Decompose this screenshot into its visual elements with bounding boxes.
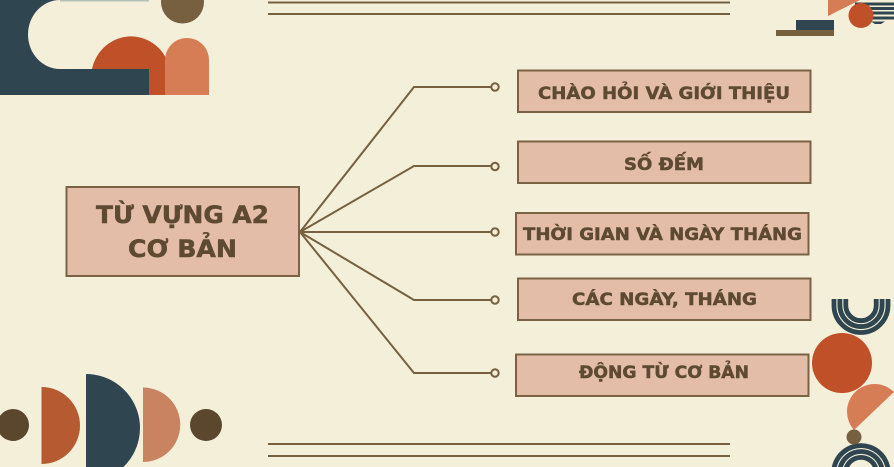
topic box: numbers: SỐ ĐẾM: [624, 151, 704, 175]
connector end markers: [491, 83, 499, 377]
topic box: days and months: CÁC NGÀY, THÁNG: [572, 288, 757, 310]
topic box: basic verbs: ĐỘNG TỪ CƠ BẢN: [579, 360, 749, 383]
topic box: basic verbs: [516, 354, 808, 396]
decoration: top left shapes: [0, 0, 209, 95]
central topic box: TỪ VỰNG A2: [96, 199, 269, 229]
topic box: time and dates: THỜI GIAN VÀ NGÀY THÁNG: [523, 223, 802, 245]
decoration: right side shapes: [812, 299, 894, 467]
decoration: top right shapes: [776, 0, 894, 36]
decoration: bottom left half circles: [0, 374, 222, 467]
central topic box: [66, 187, 299, 276]
topic box: numbers: [518, 142, 810, 183]
central topic box: CƠ BẢN: [128, 230, 237, 263]
connector lines from the central topic: [300, 87, 491, 373]
topic box: greetings: CHÀO HỎI VÀ GIỚI THIỆU: [538, 80, 790, 104]
topic box: time and dates: [516, 213, 808, 254]
topic box: days and months: [518, 278, 810, 320]
decoration: top double line: [268, 2, 730, 15]
decoration: bottom double line: [268, 443, 730, 457]
topic box: greetings: [518, 70, 810, 112]
